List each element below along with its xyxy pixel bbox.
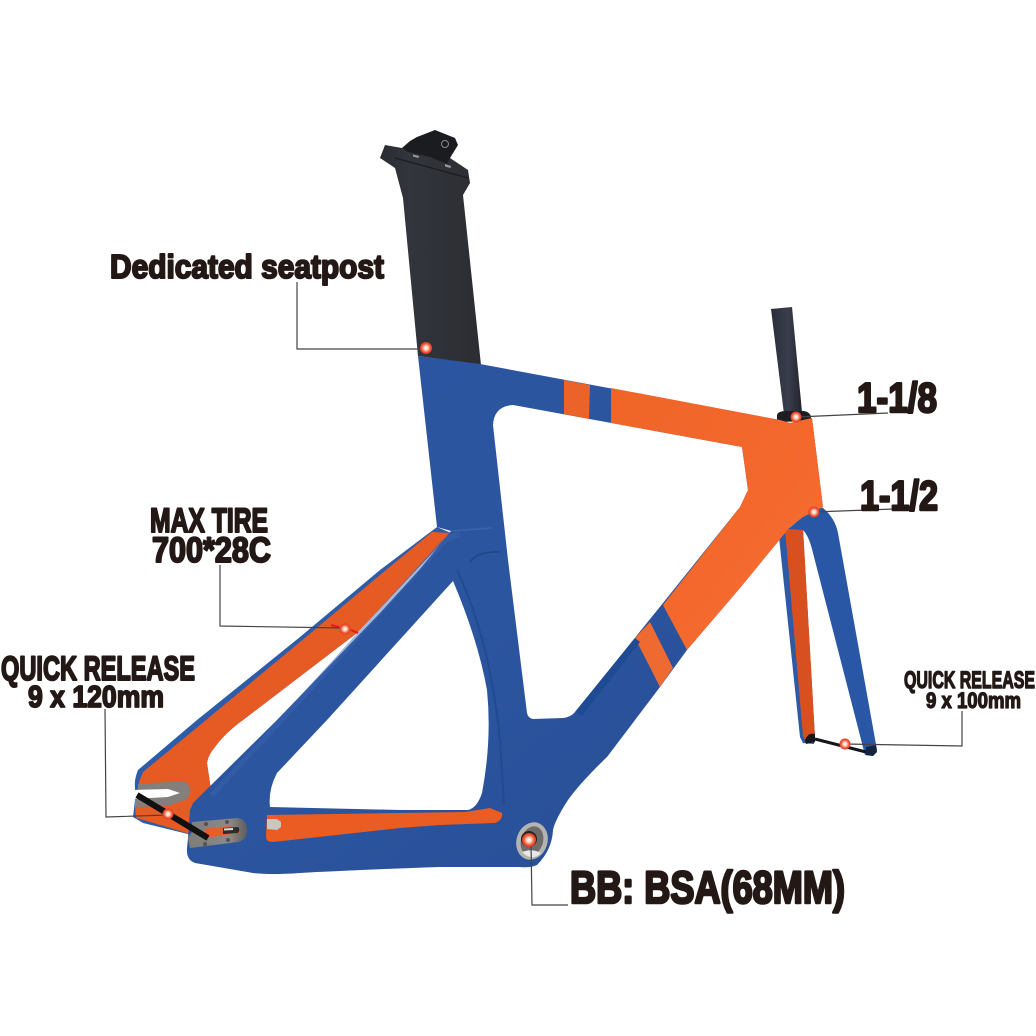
tire clearance marker xyxy=(331,625,358,633)
seatpost body xyxy=(380,145,481,365)
far fork blade xyxy=(779,528,815,744)
down tube orange stripe xyxy=(635,622,673,687)
callout: 1-1/8: 1-1/8 xyxy=(857,374,937,421)
front orange section xyxy=(611,388,823,650)
rear axle skewer xyxy=(137,795,208,838)
callout: 1-1/2: 1-1/2 xyxy=(860,472,938,519)
clamp bolt ring xyxy=(442,140,448,148)
callout: max tire xyxy=(150,502,350,634)
front fork xyxy=(779,507,877,756)
callout: bottom bracket xyxy=(522,833,845,913)
callout: dedicated seatpost: Dedicated seatpost xyxy=(110,248,384,285)
shading: seat tube contour xyxy=(470,552,500,562)
clamp silver bolts xyxy=(413,154,451,168)
top tube orange stripe xyxy=(564,380,590,419)
front axle skewer xyxy=(815,739,866,752)
saddle clamp xyxy=(402,130,458,164)
near fork blade xyxy=(788,507,877,756)
near stay highlight xyxy=(212,534,460,795)
rear seatstay (far side, orange inside) xyxy=(132,527,451,836)
callout: bottom bracket: BB: BSA(68MM) xyxy=(570,862,845,913)
callout: dedicated seatpost xyxy=(110,248,432,354)
callout: quick release front xyxy=(840,667,1035,750)
rear dropout plate xyxy=(135,781,190,807)
seatpost xyxy=(380,130,481,365)
steerer tube and headset xyxy=(771,307,811,422)
callout: quick release rear xyxy=(1,650,195,820)
clamp rail xyxy=(395,158,468,178)
rear dropout slot xyxy=(132,789,180,799)
fork tips xyxy=(805,734,815,744)
callout: max tire: MAX TIRE xyxy=(150,502,268,540)
chainstay orange inset xyxy=(266,808,502,842)
bottom bracket shell xyxy=(511,818,553,864)
rear dropout plate near xyxy=(188,818,247,848)
callout: max tire: 700*28C xyxy=(152,531,271,570)
callout: 1-1/2 xyxy=(808,472,938,519)
shading: down tube upper edge xyxy=(575,638,640,716)
callout: quick release rear: 9 x 120mm xyxy=(28,679,164,714)
chainstay bolt xyxy=(267,819,281,830)
callout: quick release front: 9 x 100mm xyxy=(926,688,1021,713)
callout: quick release rear: QUICK RELEASE xyxy=(1,650,195,688)
callout: 1-1/8 xyxy=(790,374,937,422)
main frame blue xyxy=(187,356,823,874)
